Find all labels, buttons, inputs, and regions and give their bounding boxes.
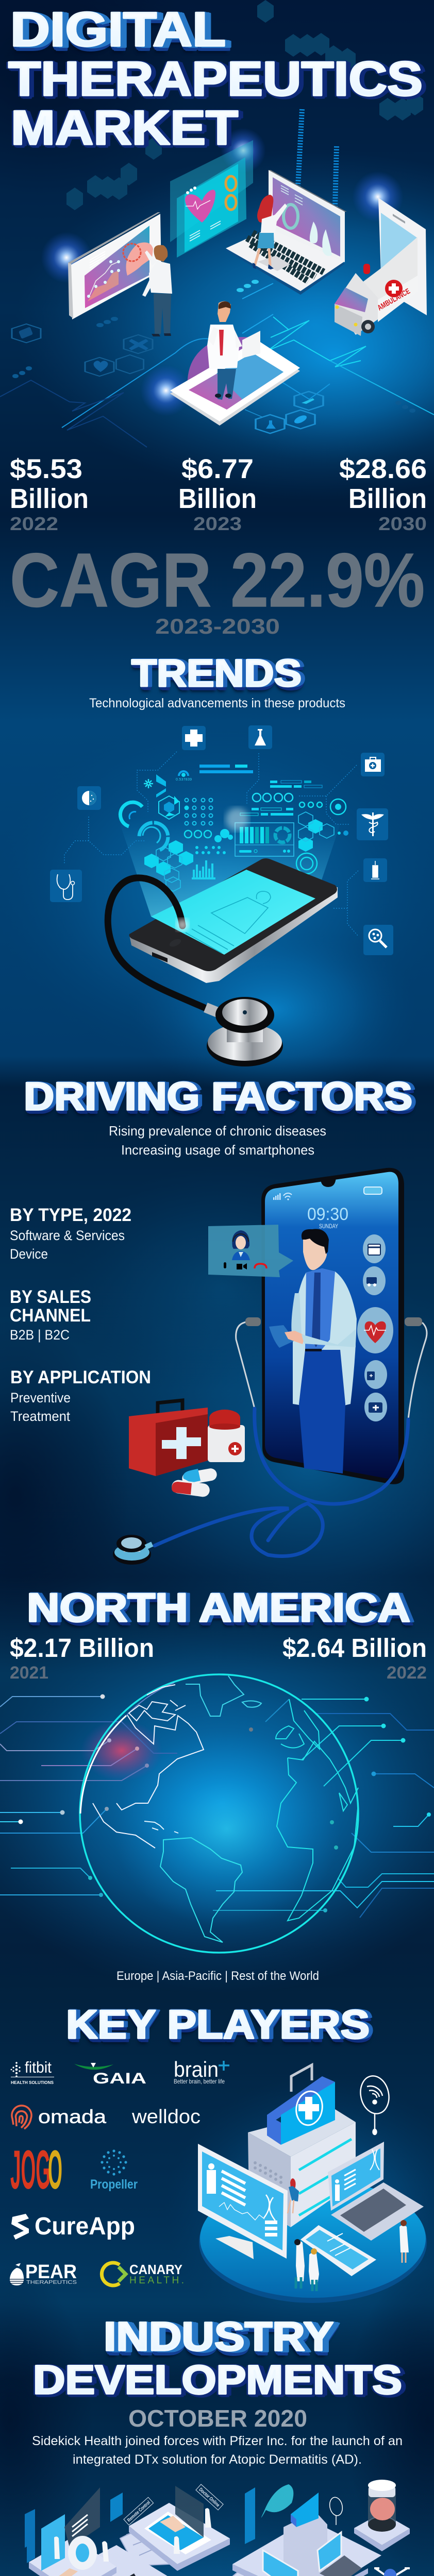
monitor bbox=[198, 2144, 288, 2259]
platform: big left deck bbox=[33, 2545, 224, 2576]
small staff figures bbox=[288, 2178, 409, 2291]
doctor figure bbox=[269, 1229, 357, 1473]
segment: by application: Treatment bbox=[10, 1409, 70, 1424]
phone app icons bbox=[357, 1234, 393, 1421]
logo: Canary Health bbox=[102, 2262, 184, 2286]
hero: right phone with ambulance: AMBULANCE bbox=[376, 287, 412, 312]
segment: by type bbox=[10, 1205, 131, 1262]
logos: JOG bbox=[10, 2139, 51, 2200]
hero: hexagon molecule chains bbox=[66, 0, 423, 210]
driving factors text: Increasing usage of smartphones bbox=[121, 1142, 314, 1158]
stat: 2030: $28.66 bbox=[339, 454, 427, 484]
driving factors heading: DRIVING FACTORS bbox=[24, 1075, 412, 1118]
development text: Sidekick Health joined forces with Pfizer Inc. for the launch of an bbox=[32, 2434, 403, 2448]
hero: floating glass heart dashboard bbox=[170, 140, 253, 258]
stat: 2022 bbox=[10, 454, 89, 534]
north america heading: NORTH AMERICA bbox=[27, 1585, 410, 1630]
logo: JOGO bbox=[10, 2139, 62, 2200]
icon: stethoscope bbox=[50, 870, 82, 902]
industry developments heading bbox=[33, 2313, 402, 2402]
logo: GAIA bbox=[74, 2063, 146, 2087]
segment: by sales channel: B2B | B2C bbox=[10, 1327, 70, 1343]
segment: by sales channel: BY SALES bbox=[10, 1287, 91, 1307]
phone clock: 09:30 bbox=[307, 1205, 348, 1224]
logo: welldoc: welldoc bbox=[131, 2106, 201, 2128]
logo: Propeller bbox=[90, 2149, 138, 2192]
stat: 2022: $5.53 bbox=[10, 454, 82, 484]
driving factors: pills bbox=[171, 1467, 218, 1498]
stat: 2022 bbox=[282, 1633, 427, 1683]
segment: by application: Preventive bbox=[10, 1390, 71, 1405]
CAGR figure: 2023-2030 bbox=[155, 614, 280, 638]
platform: MRI bbox=[25, 2487, 123, 2576]
hero: man at tablet bbox=[142, 245, 172, 336]
label boards: Remote Control bbox=[126, 2500, 152, 2523]
logo: brain+: Better brain, better life bbox=[174, 2078, 225, 2085]
title: MARKET bbox=[11, 100, 238, 155]
phone clock: SUNDAY bbox=[319, 1223, 338, 1230]
stat: 2023: Billion bbox=[178, 483, 257, 514]
phone status bar bbox=[273, 1187, 382, 1200]
logo: fitbit: fitbit bbox=[25, 2058, 52, 2076]
trends: holographic interface elements bbox=[120, 765, 348, 891]
market size stats bbox=[10, 454, 427, 534]
wifi bubble bbox=[357, 2073, 392, 2134]
stat: 2030 bbox=[339, 454, 427, 534]
label boards: Doctor Online bbox=[198, 2487, 221, 2509]
industry developments heading: DEVELOPMENTS bbox=[33, 2357, 402, 2402]
stat: 2023 bbox=[178, 454, 257, 534]
trends: dotted connectors bbox=[64, 752, 358, 936]
segment: by sales channel: CHANNEL bbox=[10, 1306, 91, 1326]
stat: 2022: 2022 bbox=[387, 1663, 427, 1683]
icon: magnifier bbox=[363, 925, 393, 955]
logo: Canary Health: HEALTH. bbox=[129, 2275, 184, 2286]
hero: right phone with ambulance bbox=[335, 198, 427, 336]
key players: isometric hospital illustration bbox=[198, 2065, 427, 2303]
driving factors: chest piece bbox=[113, 1535, 153, 1565]
icon: caduceus bbox=[357, 808, 388, 840]
icon: flask bbox=[248, 725, 272, 749]
trends: holographic interface elements: 0.537839 bbox=[176, 778, 192, 782]
brain jar bbox=[354, 2480, 410, 2551]
north america stats bbox=[10, 1633, 427, 1683]
stat: 2030: 2030 bbox=[378, 513, 427, 534]
trends: smartphone with doctor hologram bbox=[129, 858, 338, 983]
trends heading: TRENDS bbox=[131, 652, 302, 694]
icon: medical cross bbox=[182, 726, 206, 750]
driving factors: video call bubble bbox=[208, 1225, 293, 1277]
drone bbox=[374, 2568, 410, 2576]
globe: circuit lines bbox=[0, 1694, 434, 1918]
hero: laptop with lung screen bbox=[226, 170, 347, 295]
globe: sphere and continents bbox=[80, 1674, 358, 1953]
icon: syringe bbox=[363, 858, 387, 882]
driving factors text: Rising prevalence of chronic diseases bbox=[109, 1123, 326, 1139]
logo: omada: omada bbox=[38, 2106, 106, 2127]
logo: fitbit: HEALTH SOLUTIONS bbox=[11, 2080, 54, 2085]
stat: 2022: 2022 bbox=[10, 513, 58, 534]
stat: 2022: Billion bbox=[10, 483, 89, 514]
stat: 2023: 2023 bbox=[193, 513, 242, 534]
hero: DNA helix strands bbox=[298, 109, 337, 207]
hero: hexagon medical icons bbox=[12, 324, 323, 433]
industry developments heading: INDUSTRY bbox=[104, 2313, 333, 2359]
logo: PEAR therapeutics: THERAPEUTICS bbox=[26, 2280, 77, 2285]
platform disc bbox=[199, 2179, 427, 2303]
stat: 2021 bbox=[10, 1633, 154, 1683]
stat: 2030: Billion bbox=[348, 483, 427, 514]
title: DIGITAL bbox=[10, 2, 226, 56]
platform: server and case bbox=[232, 2484, 381, 2576]
platform: doctor with patient bed bbox=[129, 2486, 230, 2571]
hero: glowing light orbs bbox=[41, 128, 404, 416]
driving factors: stethoscope wrapped around phone bbox=[155, 1317, 427, 1556]
label boards bbox=[124, 2484, 223, 2525]
isometric healthcare city bbox=[12, 2480, 423, 2576]
logo: PEAR therapeutics: PEAR bbox=[25, 2261, 77, 2283]
icon: first aid kit bbox=[361, 753, 385, 776]
laptop bbox=[328, 2142, 424, 2241]
hero: circuit and ECG lines bbox=[0, 280, 434, 447]
logo: fitbit bbox=[11, 2058, 54, 2085]
hero: left tablet with brain screen bbox=[68, 212, 161, 319]
key players heading: KEY PLAYERS bbox=[66, 2002, 370, 2047]
trends text: Technological advancements in these products bbox=[89, 696, 345, 710]
development date: OCTOBER 2020 bbox=[128, 2405, 307, 2432]
mobile phone bbox=[301, 2225, 376, 2276]
icon: half moon cell bbox=[77, 786, 101, 810]
medical case bbox=[267, 2065, 335, 2145]
segment: by type: Device bbox=[10, 1246, 48, 1262]
stat: 2023: $6.77 bbox=[181, 454, 254, 484]
trends: stethoscope bbox=[108, 878, 283, 1066]
logo: Canary Health: CANARY bbox=[129, 2262, 182, 2277]
regions list: Europe | Asia-Pacific | Rest of the World bbox=[116, 1969, 319, 1983]
segment: by sales channel bbox=[10, 1287, 91, 1343]
driving factors: first aid kit and bottle bbox=[129, 1400, 245, 1476]
logo: PEAR therapeutics bbox=[10, 2261, 77, 2285]
stat: 2021: $2.17 Billion bbox=[10, 1633, 154, 1663]
stairs bbox=[90, 2522, 356, 2576]
globe: pink glow bbox=[80, 1720, 163, 1782]
trends: hologram light cone bbox=[118, 817, 340, 917]
title: THERAPEUTICS bbox=[8, 52, 423, 106]
segment: by type: BY TYPE, 2022 bbox=[10, 1205, 131, 1225]
segment: by application: BY APPLICATION bbox=[10, 1367, 151, 1387]
logo: Propeller: Propeller bbox=[90, 2177, 138, 2192]
server tower bbox=[248, 2109, 356, 2227]
stat: 2022: $2.64 Billion bbox=[282, 1633, 427, 1663]
logos: O bbox=[48, 2139, 62, 2200]
driving factors: smartphone with doctor bbox=[261, 1168, 404, 1484]
title bbox=[8, 2, 423, 155]
hero: woman at laptop bbox=[253, 195, 287, 269]
hero: doctor standing on phone bbox=[170, 301, 300, 426]
segment: by type: Software & Services bbox=[10, 1228, 125, 1243]
logo: omada bbox=[12, 2106, 106, 2129]
logo: CureApp: CureApp bbox=[35, 2213, 135, 2240]
logo: brain+: brain bbox=[174, 2057, 219, 2081]
logo: GAIA: GAIA bbox=[93, 2070, 146, 2087]
platform: desk and consultation bbox=[77, 2573, 192, 2576]
driving factors text bbox=[109, 1123, 326, 1158]
segment: by application bbox=[10, 1367, 151, 1424]
development text bbox=[32, 2434, 403, 2467]
trends: icon tiles bbox=[50, 725, 393, 955]
development text: integrated DTx solution for Atopic Dermatitis (AD). bbox=[73, 2452, 362, 2467]
stat: 2021: 2021 bbox=[10, 1663, 48, 1683]
logos bbox=[10, 2057, 229, 2286]
